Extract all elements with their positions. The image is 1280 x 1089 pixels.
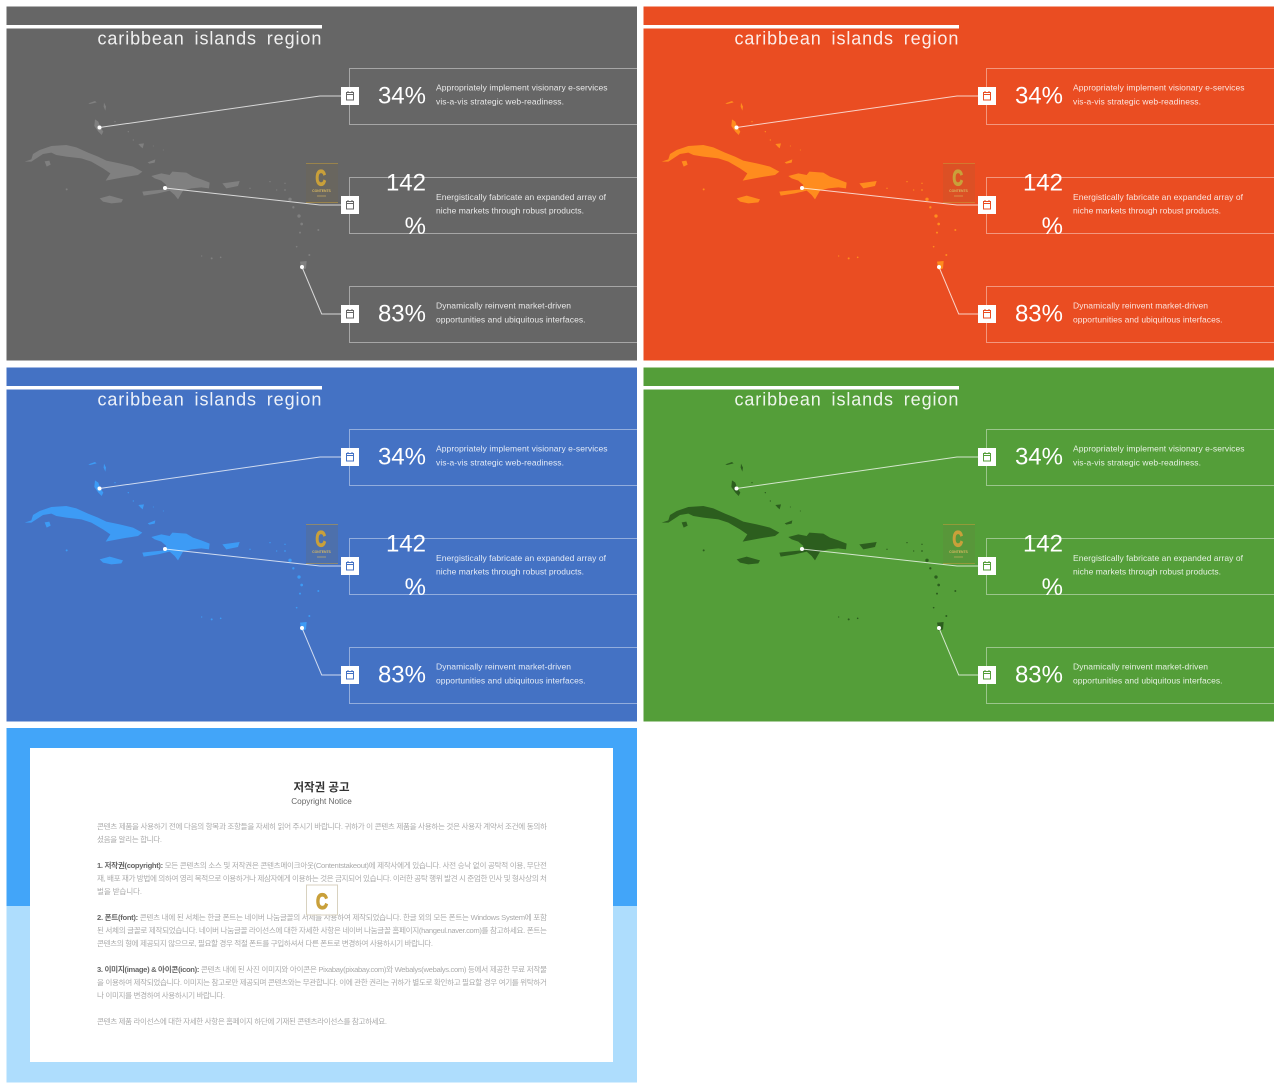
stat row 1: vis-a-vis strategic web-readiness.	[436, 457, 564, 467]
connector lines	[734, 457, 978, 675]
panel: grey	[6, 6, 637, 360]
panel: green	[644, 368, 1274, 722]
stat row 2: Energistically fabricate an expanded array of	[436, 553, 607, 563]
panel background	[6, 368, 637, 722]
panel background	[644, 6, 1274, 360]
stat row 1: Appropriately implement visionary e-services	[436, 83, 608, 93]
stat row 2: Energistically fabricate an expanded array of	[436, 192, 607, 202]
map: caribbean islands	[662, 462, 956, 631]
section 1: copyright: 벌을 받습니다.	[97, 886, 142, 896]
stat row 2: %	[1042, 213, 1063, 240]
stat row 2	[341, 170, 637, 240]
notice heading: Copyright Notice	[291, 797, 352, 806]
stat row 1: vis-a-vis strategic web-readiness.	[1073, 96, 1201, 106]
stat row 1	[341, 68, 637, 124]
stat row 3	[341, 648, 637, 704]
section 1: copyright: 재, 배포 재가 방법에 의하여 영리 목적으로 이용하거나 제삼자에게 이용하는 것은 금지되어 있습니다. 이러한 공탁 행위 발견 시 준엄한 민사 및 형사상의 처	[97, 873, 547, 883]
logo: C	[316, 166, 326, 190]
stat row 1: vis-a-vis strategic web-readiness.	[436, 96, 564, 106]
logo	[306, 885, 338, 915]
stat row 3: 83%	[378, 662, 426, 689]
logo: C	[952, 166, 963, 190]
title	[644, 25, 959, 48]
two-tone background	[6, 728, 637, 1082]
stat row 3: opportunities and ubiquitous interfaces.	[436, 675, 586, 685]
stat row 2: 142	[386, 531, 426, 558]
stat row 1: 34%	[1015, 82, 1063, 109]
logo	[306, 524, 338, 564]
logo: CONTENTS	[949, 189, 969, 193]
section 1: copyright: 1. 저작권(copyright): 모든 콘텐츠의 소스 및 저작권은 콘텐츠메이크아웃(Contentstakeout)에 제작사에게 있습니다. 사전 승낙 없이 공탁적 이용, 무단전	[97, 860, 547, 870]
stat row 3: opportunities and ubiquitous interfaces.	[1073, 675, 1222, 685]
stat row 3: Dynamically reinvent market-driven	[436, 661, 571, 671]
notice heading: 저작권 공고	[293, 780, 350, 794]
section 2: font: 콘텐츠의 형에 제공되지 않으므로, 필요할 경우 적절 폰트를 구입하셔서 다른 폰트로 변경하여 사용하시기 바랍니다.	[97, 938, 433, 948]
stat row 2: niche markets through robust products.	[1073, 566, 1221, 576]
intro paragraph: 셨음을 알리는 합니다.	[97, 834, 162, 844]
panel: blue	[6, 368, 637, 722]
stat row 3	[978, 648, 1274, 704]
section 2: font: 된 서체의 글꼴로 제작되었습니다. 네이버 나눔글꼴 라이선스에 대한 자세한 사항은 네이버 나눔글꼴 홈페이지(hangeul.naver.com)를 참고하세요. 폰트는	[97, 925, 547, 935]
stat row 3: 83%	[378, 301, 426, 328]
logo: C	[316, 526, 326, 552]
stat row 1	[978, 68, 1274, 124]
stat row 3: opportunities and ubiquitous interfaces.	[1073, 314, 1222, 324]
stat row 1: Appropriately implement visionary e-services	[1073, 444, 1244, 454]
stat row 2: niche markets through robust products.	[436, 205, 584, 215]
stat row 3: opportunities and ubiquitous interfaces.	[436, 314, 586, 324]
stat row 2	[978, 531, 1274, 601]
title	[6, 386, 322, 409]
stat row 1: vis-a-vis strategic web-readiness.	[1073, 457, 1201, 467]
logo: C	[952, 526, 963, 552]
stat row 3: 83%	[1015, 301, 1063, 328]
stat row 2	[978, 170, 1274, 240]
stat row 1: 34%	[378, 443, 426, 470]
logo	[306, 163, 338, 203]
logo	[943, 524, 975, 564]
stat row 2: %	[405, 213, 426, 240]
section 3: image and icon: 을 이용하여 제작되었습니다. 이미지는 참고로만 제공되며 콘텐츠와는 무관합니다. 이에 관한 권리는 귀하가 별도로 확인하고 필요할 경우 여기를 위탁하거	[97, 977, 547, 987]
stat row 2: 142	[1023, 170, 1063, 197]
stat row 2: 142	[1023, 531, 1063, 558]
title: caribbean islands region	[734, 389, 959, 409]
logo: CONTENTS	[312, 550, 332, 554]
title	[6, 25, 322, 48]
closing line: 콘텐츠 제품 라이선스에 대한 자세한 사항은 홈페이지 하단에 기재된 콘텐츠라이선스를 참고하세요.	[97, 1016, 387, 1026]
stat row 1: Appropriately implement visionary e-services	[1073, 83, 1244, 93]
map: caribbean islands	[662, 101, 956, 270]
map: caribbean islands	[25, 462, 319, 631]
section 3: image and icon	[97, 964, 547, 1000]
stat row 1	[341, 430, 637, 486]
title: caribbean islands region	[98, 389, 322, 409]
section 2: font: 2. 폰트(font): 콘텐츠 내에 된 서체는 한글 폰트는 네이버 나눔글꼴의 서체를 사용하여 제작되었습니다. 한글 외의 모든 폰트는 Windows System에 포함	[97, 912, 547, 922]
section 1: copyright	[97, 860, 547, 896]
map: caribbean islands	[25, 101, 319, 270]
connector lines	[98, 96, 341, 314]
stat row 2: Energistically fabricate an expanded array of	[1073, 192, 1244, 202]
stat row 3: Dynamically reinvent market-driven	[1073, 661, 1208, 671]
panel: copyright notice	[6, 728, 637, 1082]
logo: CONTENTS	[312, 189, 332, 193]
title: caribbean islands region	[98, 28, 322, 48]
notice card	[30, 748, 613, 1062]
title: caribbean islands region	[734, 28, 959, 48]
stat row 2	[341, 531, 637, 601]
stat row 2: niche markets through robust products.	[436, 566, 584, 576]
panel background	[644, 368, 1274, 722]
stat row 1: 34%	[1015, 443, 1063, 470]
logo	[943, 163, 975, 203]
intro paragraph: 콘텐츠 제품을 사용하기 전에 다음의 항목과 조항들을 자세히 읽어 주시기 바랍니다. 귀하가 이 콘텐츠 제품을 사용하는 것은 사용자 계약서 조건에 동의하	[97, 821, 547, 831]
connector lines	[734, 96, 978, 314]
logo: C	[316, 889, 328, 914]
intro paragraph	[97, 821, 547, 844]
connector lines	[98, 457, 341, 675]
panel background	[6, 6, 637, 360]
title	[644, 386, 959, 409]
notice heading	[291, 780, 352, 806]
stat row 3: 83%	[1015, 662, 1063, 689]
stat row 3	[341, 286, 637, 342]
stat row 2: 142	[386, 170, 426, 197]
stat row 3: Dynamically reinvent market-driven	[436, 300, 571, 310]
stat row 3: Dynamically reinvent market-driven	[1073, 300, 1208, 310]
section 2: font	[97, 912, 547, 948]
stat row 3	[978, 286, 1274, 342]
section 3: image and icon: 3. 이미지(image) & 아이콘(icon): 콘텐츠 내에 된 사진 이미지와 아이콘은 Pixabay(pixabay.com)와 Webalys(webalys.com) 등에서 제공한 무료 저작물	[97, 964, 547, 974]
logo: CONTENTS	[949, 550, 969, 554]
stat row 1: 34%	[378, 82, 426, 109]
stat row 1: Appropriately implement visionary e-services	[436, 444, 608, 454]
stat row 2: %	[1042, 574, 1063, 601]
panel: orange	[644, 6, 1274, 360]
stat row 2: Energistically fabricate an expanded array of	[1073, 553, 1244, 563]
stat row 2: %	[405, 574, 426, 601]
stat row 1	[978, 430, 1274, 486]
stat row 2: niche markets through robust products.	[1073, 205, 1221, 215]
section 3: image and icon: 나 이미지를 변경하여 사용하시기 바랍니다.	[97, 990, 225, 1000]
